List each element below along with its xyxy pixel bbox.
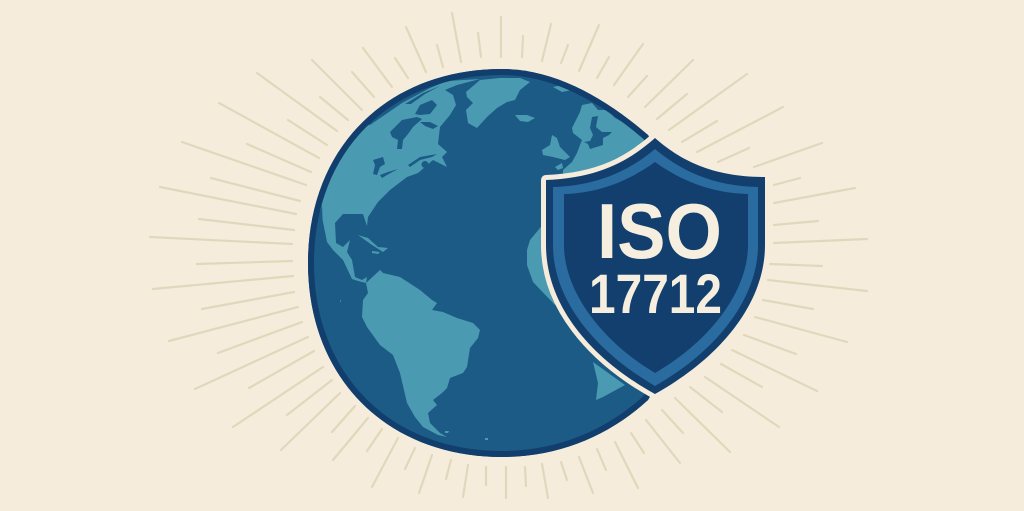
shield badge: [546, 138, 765, 394]
globe ocean: [308, 69, 690, 457]
great lakes: [373, 157, 398, 178]
land: west africa: [527, 227, 555, 305]
shield inner: [564, 162, 748, 373]
continents: [315, 78, 649, 440]
text: ISO: ISO: [597, 187, 722, 275]
land: arctic channels and bays: [320, 86, 440, 232]
land: north america: [315, 79, 480, 283]
bay: baltic sea: [584, 116, 612, 149]
coastal streak: [320, 205, 322, 219]
land: europe: [563, 103, 649, 174]
land: british isles: [542, 135, 570, 170]
land: caribbean islands: [358, 235, 388, 254]
land: svalbard: [553, 86, 570, 92]
shield outline: [546, 138, 765, 394]
sunburst rays: [150, 13, 867, 498]
shield band: [553, 149, 758, 386]
land: greenland: [466, 78, 530, 128]
globe: [308, 69, 650, 457]
globe rim: [308, 69, 650, 457]
arctic channels: [405, 86, 440, 129]
hudson bay: [390, 117, 422, 149]
land: south america: [362, 270, 480, 437]
st lawrence: [408, 154, 437, 168]
text: 17712: 17712: [589, 262, 722, 325]
land: iceland: [515, 115, 535, 122]
land: islands of south atlantic: [340, 299, 488, 440]
land: southern africa: [593, 362, 625, 400]
